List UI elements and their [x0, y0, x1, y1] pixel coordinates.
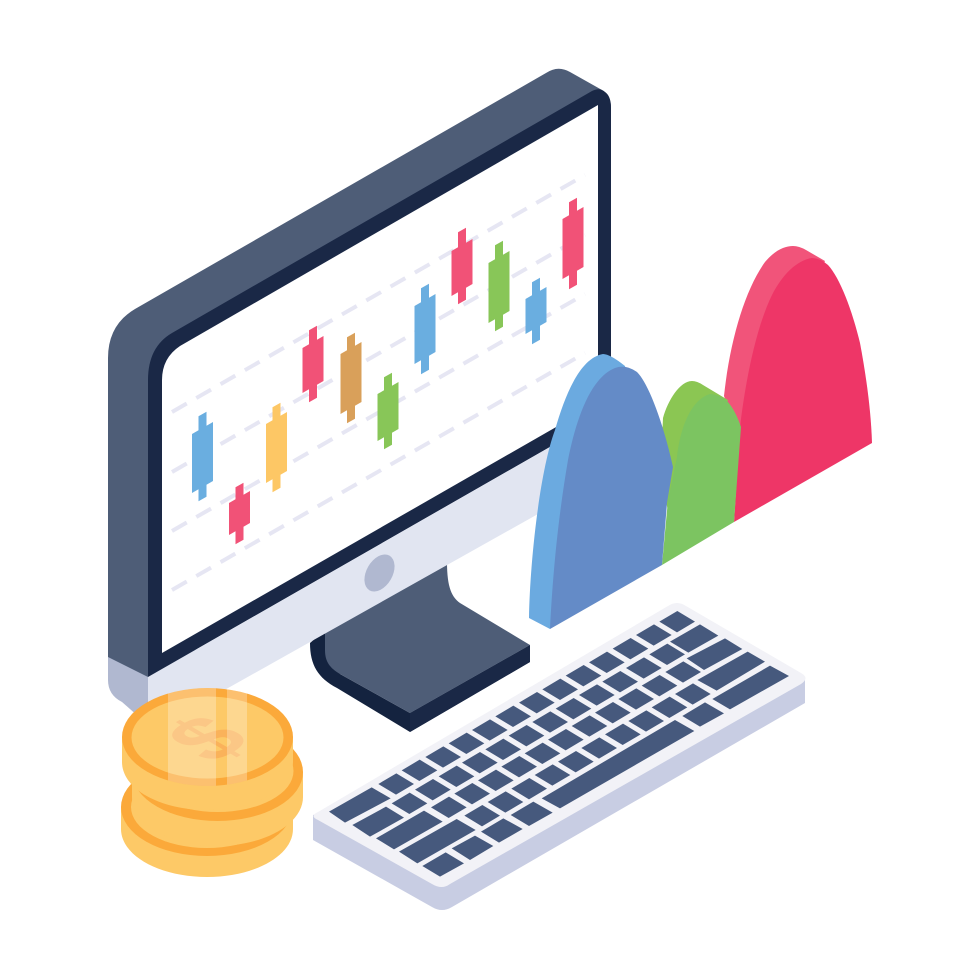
- green hill: [660, 381, 741, 565]
- monitor base corner: [108, 657, 148, 725]
- monitor back bezel: [108, 69, 611, 690]
- keys: [329, 611, 789, 877]
- keyboard top: [314, 603, 806, 887]
- coin stack: [121, 685, 303, 877]
- top coin: [122, 685, 293, 810]
- red hill: [724, 246, 872, 522]
- dollar sign: $: [146, 703, 270, 774]
- keyboard: [313, 603, 806, 910]
- screen: [162, 105, 598, 653]
- power button: [358, 549, 401, 597]
- middle coin: [132, 723, 303, 846]
- blue hill: [529, 354, 673, 629]
- 3D area chart: [529, 246, 872, 629]
- monitor chin: [148, 412, 611, 733]
- coin shine: [168, 685, 247, 790]
- keyboard side: [313, 678, 805, 910]
- bottom coin: [121, 758, 293, 877]
- chart grid lines: [172, 175, 585, 590]
- monitor inner bezel: [148, 89, 611, 677]
- monitor stand: [310, 562, 530, 732]
- monitor: [108, 69, 611, 733]
- candlestick chart: [192, 194, 584, 548]
- illustration: trading desktop: [108, 68, 872, 910]
